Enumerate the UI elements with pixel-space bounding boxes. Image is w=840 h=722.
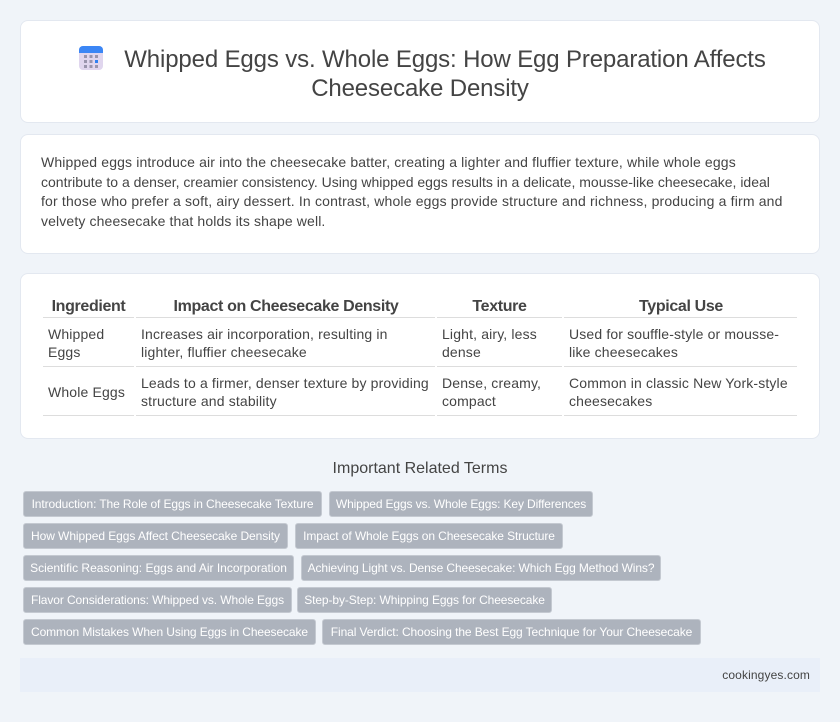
row 2: impact: Leads to a firmer, denser texture by providing (141, 375, 429, 391)
tag: Final Verdict: Choosing the Best Egg Technique for Your Cheesecake (331, 625, 692, 639)
row 1: ingredient (48, 326, 104, 360)
tag (329, 491, 593, 517)
header: impact: Impact on Cheesecake Density (174, 298, 398, 315)
row 1: texture (442, 326, 537, 360)
tag: Common Mistakes When Using Eggs in Cheesecake (31, 625, 308, 639)
intro paragraph: Whipped eggs introduce air into the cheesecake batter, creating a lighter and fluffier texture, while whole eggs (41, 154, 736, 170)
intro card (20, 134, 820, 254)
tag: Scientific Reasoning: Eggs and Air Incorporation (30, 561, 287, 575)
row 1: impact: Increases air incorporation, resulting in (141, 326, 388, 342)
row 1: use (569, 326, 779, 360)
row 1: ingredient: Whipped (48, 326, 104, 342)
tag (322, 619, 701, 645)
footer source: cookingyes.com (722, 668, 810, 682)
row 1: texture: dense (442, 344, 481, 360)
tag: How Whipped Eggs Affect Cheesecake Density (31, 529, 280, 543)
intro paragraph: contribute to a denser, creamier consistency. Using whipped eggs results in a delicate, mousse-like cheesecake, ideal (41, 174, 770, 190)
row 2: impact (141, 375, 429, 409)
row 2: ingredient: Whole Eggs (48, 384, 125, 400)
row 2: texture (442, 375, 541, 409)
row 2: texture: Dense, creamy, (442, 375, 541, 391)
title: Cheesecake Density (311, 75, 529, 102)
tag: Step-by-Step: Whipping Eggs for Cheesecake (304, 593, 545, 607)
row 1: impact: lighter, fluffier cheesecake (141, 344, 307, 360)
related terms heading: Important Related Terms (333, 460, 507, 477)
title card (20, 20, 820, 123)
title (124, 46, 766, 102)
tag: Introduction: The Role of Eggs in Cheesecake Texture (32, 497, 313, 511)
table card (20, 273, 820, 439)
tag: Whipped Eggs vs. Whole Eggs: Key Differences (336, 497, 586, 511)
intro paragraph (41, 154, 783, 229)
icon: calendar (79, 46, 103, 70)
tag (23, 619, 316, 645)
row 2: impact: structure and stability (141, 393, 277, 409)
intro paragraph: velvety cheesecake that holds its shape well. (41, 213, 325, 229)
row 1: use: like cheesecakes (569, 344, 678, 360)
tag (301, 555, 661, 581)
intro paragraph: for those who prefer a soft, airy dessert. In contrast, whole eggs provide structure and richness, producing a firm and (41, 193, 783, 209)
tag: Flavor Considerations: Whipped vs. Whole Eggs (31, 593, 284, 607)
row 1: ingredient: Eggs (48, 344, 81, 360)
tag (297, 587, 552, 613)
header: typical use: Typical Use (639, 298, 723, 315)
tag (23, 555, 294, 581)
tag (295, 523, 563, 549)
tag (23, 491, 322, 517)
row 2: texture: compact (442, 393, 496, 409)
header: ingredient: Ingredient (52, 298, 125, 315)
row 1: impact (141, 326, 388, 360)
header: texture: Texture (472, 298, 527, 315)
row 2: use: Common in classic New York-style (569, 375, 788, 391)
row 1: texture: Light, airy, less (442, 326, 537, 342)
tag (23, 523, 288, 549)
tag: Achieving Light vs. Dense Cheesecake: Which Egg Method Wins? (308, 561, 654, 575)
row 2: use (569, 375, 788, 409)
row 2: use: cheesecakes (569, 393, 652, 409)
comparison table (43, 298, 797, 416)
title: Whipped Eggs vs. Whole Eggs: How Egg Preparation Affects (124, 46, 766, 73)
footer bar (20, 658, 820, 692)
tag: Impact of Whole Eggs on Cheesecake Structure (303, 529, 555, 543)
tag (23, 587, 292, 613)
row 1: use: Used for souffle-style or mousse- (569, 326, 779, 342)
